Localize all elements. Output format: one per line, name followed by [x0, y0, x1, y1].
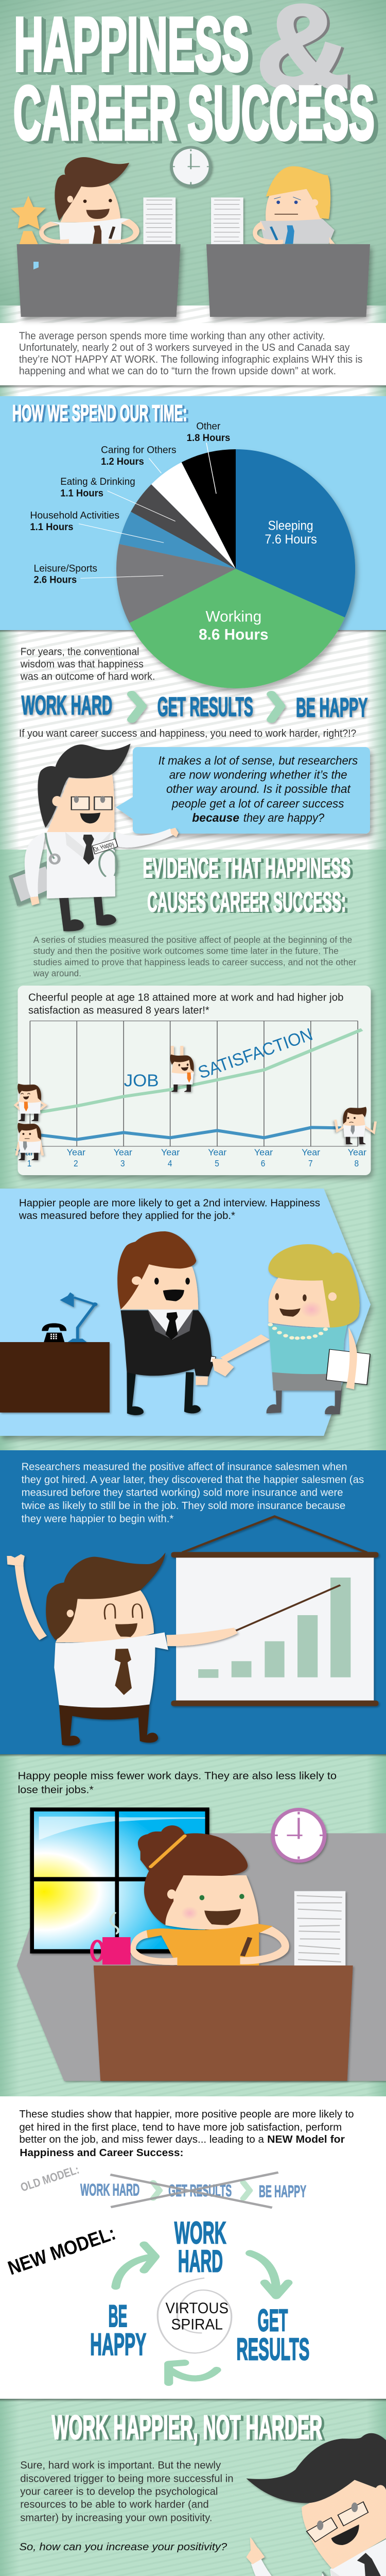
year labels: Year: [114, 1147, 132, 1157]
presentation screen and presenter: [7, 1516, 386, 2081]
document right: [211, 197, 243, 244]
interview text: was measured before they applied for the job.*: [19, 1210, 235, 1222]
clipboard: [9, 861, 57, 906]
interview text: [19, 1197, 320, 1222]
cycle labels: GET: [257, 2302, 288, 2337]
label: satisfaction: SATISFACTION: [196, 1025, 315, 1083]
old model: [19, 2163, 306, 2208]
pointer: [236, 1585, 340, 1631]
work happier text: your career is to develop the psychological: [20, 2486, 218, 2498]
intro text: [19, 330, 362, 377]
unhappy trend line: [41, 1127, 341, 1140]
ribbon tail over desk: [33, 262, 39, 269]
text: BE HAPPY: [259, 2182, 306, 2201]
salesmen text: they were happier to begin with.*: [22, 1513, 173, 1524]
interview panel: [0, 1189, 371, 1436]
year labels: 3: [120, 1159, 125, 1168]
telephone: [42, 1323, 66, 1342]
hero: title and office scene: [11, 0, 375, 268]
year labels: Year: [161, 1147, 180, 1157]
pie labels: 1.1 Hours: [30, 521, 74, 533]
office wall: [17, 1833, 386, 2081]
jumping happy person: [170, 1046, 194, 1092]
coffee mug: [92, 1912, 131, 1964]
floor band: [0, 306, 386, 323]
unhappy worker: [253, 166, 335, 245]
interview scene: [0, 1197, 370, 1415]
work happier background: [0, 2399, 386, 2576]
cycle labels: WORK: [174, 2215, 226, 2250]
summary text: better on the job, and miss fewer days... leading to a: [19, 2133, 265, 2145]
name tag: Dr. Happy: [92, 840, 116, 853]
year labels: Year: [208, 1147, 226, 1157]
intro and pie zoom group: [12, 330, 362, 426]
new model label: NEW MODEL:: [5, 2223, 118, 2280]
happy person year 1: [15, 1083, 46, 1121]
year labels: Year: [348, 1147, 366, 1157]
time section background: [0, 396, 386, 630]
reception desk: [0, 1342, 110, 1413]
doctor tie: [83, 835, 94, 865]
ribbon: [30, 244, 49, 268]
bubble text: they are happy?: [243, 811, 324, 824]
cycle labels: BE: [109, 2298, 127, 2333]
year labels: 7: [308, 1159, 313, 1168]
cycle labels: [90, 2215, 309, 2366]
conventional wisdom text: For years, the conventional: [21, 647, 139, 658]
woman figure: [130, 1825, 289, 1965]
name tag: [92, 839, 118, 854]
pie labels: 1.1 Hours: [60, 488, 103, 499]
cycle labels: HARD: [178, 2243, 223, 2278]
chart grid: [30, 1021, 358, 1146]
unhappy person year 8: [336, 1107, 376, 1144]
year labels: 5: [215, 1159, 219, 1168]
pie labels: Eating & Drinking: [60, 476, 135, 487]
evidence background: [0, 850, 386, 1450]
absence text: lose their jobs.*: [17, 1784, 94, 1796]
salesmen background: [0, 1450, 386, 1754]
doctor face: [52, 796, 112, 823]
year labels: 8: [355, 1159, 359, 1168]
doctor legs: [59, 895, 116, 931]
summary text: [19, 2108, 354, 2159]
work happier text: discovered trigger to being more successful in: [20, 2473, 234, 2484]
work happier text: Sure, hard work is important. But the newly: [20, 2460, 221, 2471]
presenter: [7, 1552, 238, 1745]
pie labels: 8.6 Hours: [199, 625, 269, 643]
stethoscope: [46, 832, 117, 877]
pie labels: 1.2 Hours: [101, 456, 144, 467]
old model flow: [22, 690, 367, 722]
chart intro text: [28, 992, 343, 1016]
trophy: [11, 196, 46, 245]
work happier text: [20, 2460, 234, 2523]
virtuous spiral label: [166, 2299, 229, 2333]
salesmen text: [22, 1461, 364, 1524]
bubble text: [159, 754, 358, 824]
evidence heading: [143, 852, 350, 917]
year labels: 2: [74, 1159, 78, 1168]
pie labels: Leisure/Sports: [34, 563, 97, 574]
label: old model: OLD MODEL:: [19, 2163, 81, 2194]
virtuous spiral label: SPIRAL: [171, 2316, 223, 2333]
year labels: 6: [261, 1159, 265, 1168]
document: [294, 1891, 345, 1965]
screen bar chart: [198, 1578, 350, 1678]
pie labels: 2.6 Hours: [34, 574, 77, 586]
question italic: So, how can you increase your positivity?: [19, 2541, 227, 2553]
pie labels: 1.8 Hours: [187, 432, 230, 444]
label: job: JOB: [124, 1071, 159, 1090]
year labels: [15, 1147, 366, 1168]
pie labels: Working: [206, 607, 261, 625]
chart intro text: satisfaction as measured 8 years later!*: [28, 1005, 209, 1016]
woman with folder: [212, 1244, 370, 1414]
evidence body: [33, 935, 357, 978]
happy trend line: [41, 1029, 362, 1112]
doctor character: [9, 743, 179, 931]
doctor pointing up: [246, 2433, 386, 2576]
old model flow: WORK HARD: [22, 690, 112, 720]
line chart: [15, 992, 376, 1168]
conventional wisdom text: wisdom was that happiness: [20, 659, 144, 670]
work happier section: [19, 2409, 386, 2576]
pie labels: Household Activities: [30, 510, 119, 521]
desk lamp: [60, 1292, 97, 1342]
cycle labels: HAPPY: [90, 2327, 146, 2362]
window: [30, 1807, 209, 1954]
document left: [143, 197, 176, 244]
wall clock: [170, 146, 212, 187]
conventional wisdom text: was an outcome of hard work.: [20, 671, 155, 682]
conventional wisdom zoom group: [19, 647, 367, 739]
pie labels: [30, 420, 317, 643]
wall clock purple: [271, 1808, 326, 1863]
presentation screen: [171, 1516, 378, 1706]
evidence zoom group: [33, 852, 357, 978]
pie labels: Other: [196, 420, 220, 432]
old model flow crossed out: GET RESULTS: [168, 2181, 232, 2200]
spiral: [157, 2278, 232, 2353]
virtuous spiral label: VIRTOUS: [166, 2299, 229, 2316]
absence section background: [0, 1754, 386, 2096]
ribbon: 1: [38, 249, 42, 260]
brown desk: [94, 1965, 353, 2081]
pie labels: Sleeping: [268, 519, 313, 533]
speech bubble: [116, 747, 370, 834]
doctor coat: [47, 832, 115, 899]
old model flow crossed out: WORK HARD: [80, 2180, 139, 2199]
year labels: Year: [302, 1147, 320, 1157]
hero background: [0, 0, 386, 306]
old model flow crossed out: [80, 2173, 306, 2208]
doctor hair: [38, 743, 131, 828]
work happier text: smarter) by increasing your own positivity.: [20, 2512, 212, 2523]
bubble text: because: [192, 811, 239, 824]
woman at desk: [19, 1825, 354, 2159]
cycle arrows: [116, 2245, 288, 2383]
pie labels: Caring for Others: [101, 444, 177, 455]
evidence body: way around.: [33, 968, 81, 978]
year labels: Year: [15, 1147, 33, 1157]
work happier text: resources to be able to work harder (and: [20, 2499, 209, 2511]
pie chart: [116, 449, 355, 688]
year labels: 4: [168, 1159, 172, 1168]
desks: [16, 244, 370, 317]
pie labels: 7.6 Hours: [265, 532, 317, 547]
doctor head: [47, 774, 114, 833]
virtuous cycle diagram: [90, 2215, 309, 2383]
man in suit: [117, 1231, 216, 1415]
conventional wisdom background: [0, 630, 386, 850]
new model background: [0, 2096, 386, 2399]
striped divider: [0, 385, 386, 396]
year labels: 1: [27, 1159, 31, 1168]
happy worker: [39, 157, 139, 244]
year labels: Year: [67, 1147, 85, 1157]
intro band background: [0, 323, 386, 385]
chart card: [17, 986, 371, 1175]
year labels: Year: [254, 1147, 273, 1157]
summary text: NEW Model for: [267, 2133, 345, 2145]
summary text: Happiness and Career Success:: [20, 2147, 183, 2159]
absence text: [17, 1770, 337, 1796]
unhappy person year 1: [16, 1123, 43, 1160]
conventional wisdom text: [20, 647, 155, 682]
